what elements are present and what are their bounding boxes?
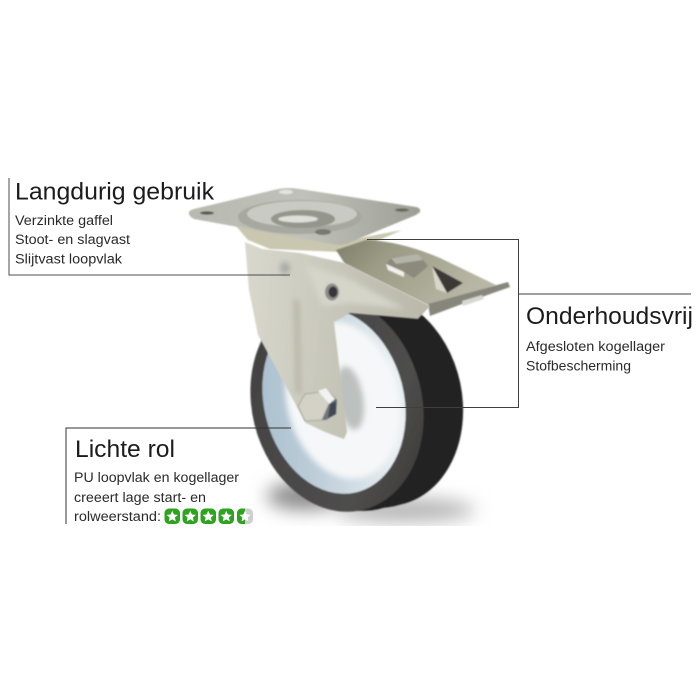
body text (15, 213, 130, 266)
body text (74, 470, 240, 524)
heading: Onderhoudsvrij (526, 303, 693, 330)
leader line (66, 428, 291, 524)
star rating (164, 508, 253, 524)
body text: Afgesloten kogellager (526, 339, 666, 354)
plate holes (200, 211, 214, 215)
tyre face (228, 278, 446, 530)
fork (245, 242, 430, 439)
body text: creeert lage start- en (74, 490, 206, 505)
body text: Stoot- en slagvast (15, 232, 130, 247)
callout: Onderhoudsvrij (367, 240, 693, 408)
body text: PU loopvlak en kogellager (74, 470, 240, 485)
brake lever (336, 240, 510, 316)
body text: Slijtvast loopvlak (15, 252, 122, 266)
body text (526, 339, 666, 374)
hub inner dish (269, 309, 417, 491)
lever pedal button (386, 254, 428, 278)
turntable (236, 226, 402, 252)
fork rivet (322, 280, 342, 304)
caster wheel photo (189, 188, 510, 530)
ground shadow (267, 482, 475, 522)
callout: Langdurig gebruik (9, 178, 290, 275)
body text: Verzinkte gaffel (15, 213, 113, 228)
leader line (9, 178, 290, 275)
leader line (367, 240, 691, 408)
mounting plate (189, 188, 420, 245)
body text: Stofbescherming (526, 358, 631, 374)
tread (237, 277, 482, 529)
hub centre (332, 364, 368, 432)
lever window (432, 266, 463, 293)
hub (243, 293, 425, 509)
axle bolt (298, 388, 337, 421)
body text: rolweerstand: (74, 509, 161, 524)
lever tab (428, 282, 510, 316)
heading: Lichte rol (75, 436, 175, 463)
fork highlights (280, 262, 405, 395)
wheel (228, 277, 482, 530)
callout: Lichte rol (66, 428, 291, 524)
heading: Langdurig gebruik (15, 178, 215, 206)
